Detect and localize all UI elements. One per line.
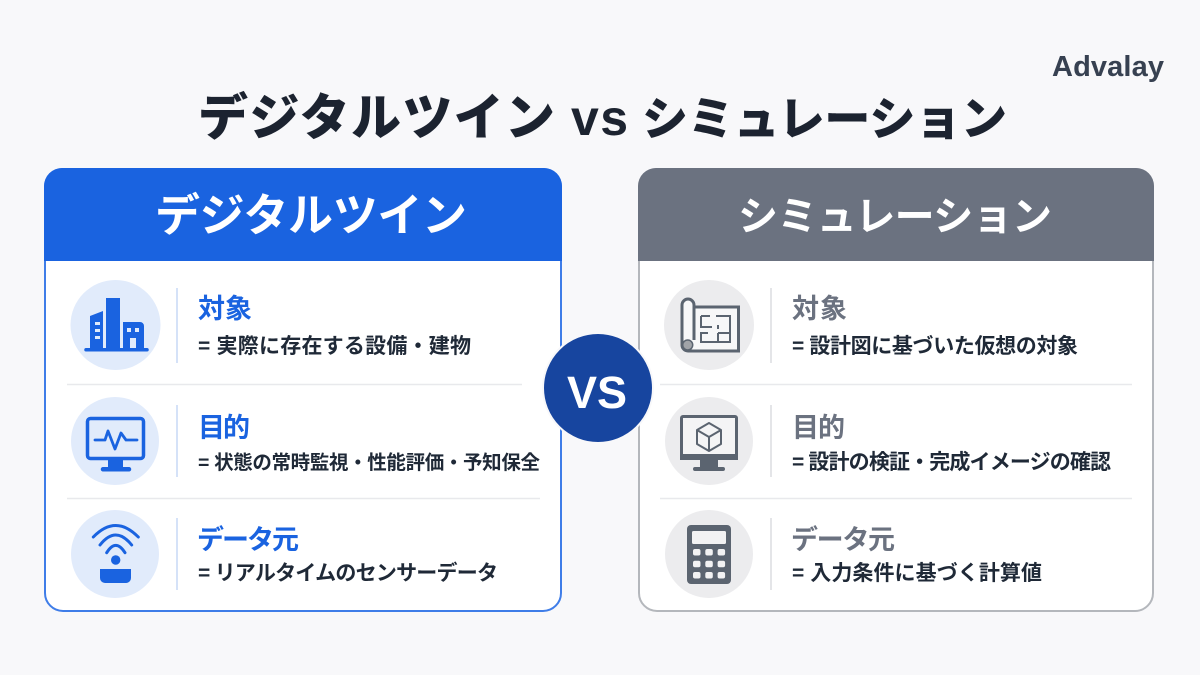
row: data source bbox=[665, 510, 1042, 598]
description: = 設計図に基づいた仮想の対象 bbox=[792, 335, 1078, 358]
card body bbox=[45, 169, 561, 611]
panel heading: デジタルツイン bbox=[155, 190, 467, 241]
brand logo: Advalay bbox=[1052, 51, 1164, 83]
VS badge bbox=[543, 333, 653, 443]
title bbox=[198, 90, 1007, 146]
row: purpose bbox=[71, 397, 540, 485]
panel header bbox=[44, 168, 562, 261]
icon: calculator bbox=[665, 510, 753, 598]
icon: wifi sensor bbox=[71, 510, 159, 598]
label: 対象 bbox=[792, 294, 847, 324]
panel header bbox=[638, 168, 1154, 261]
card body bbox=[639, 169, 1153, 611]
title: デジタルツイン bbox=[198, 90, 555, 146]
title: vs bbox=[571, 90, 628, 146]
row: target bbox=[70, 280, 471, 370]
VS badge: VS bbox=[567, 367, 627, 418]
description: = 状態の常時監視・性能評価・予知保全 bbox=[198, 451, 540, 474]
icon: monitor with cube bbox=[665, 397, 753, 485]
label: 目的 bbox=[198, 413, 250, 443]
row: purpose bbox=[665, 397, 1111, 485]
description: = リアルタイムのセンサーデータ bbox=[198, 561, 498, 585]
panel heading: シミュレーション bbox=[738, 195, 1052, 239]
description: = 設計の検証・完成イメージの確認 bbox=[792, 450, 1111, 474]
label: 目的 bbox=[792, 413, 845, 443]
title: シミュレーション bbox=[642, 93, 1007, 145]
label: データ元 bbox=[197, 524, 299, 555]
icon: buildings bbox=[70, 280, 160, 370]
label: データ元 bbox=[791, 524, 895, 555]
description: = 実際に存在する設備・建物 bbox=[198, 335, 471, 358]
row: data source bbox=[71, 510, 498, 598]
panel: digital twin bbox=[44, 168, 562, 611]
icon: monitor with pulse bbox=[71, 397, 159, 485]
label: 対象 bbox=[198, 294, 252, 324]
description: = 入力条件に基づく計算値 bbox=[792, 562, 1042, 585]
row: target bbox=[664, 280, 1078, 370]
icon: blueprint bbox=[664, 280, 754, 370]
panel: simulation bbox=[638, 168, 1154, 611]
